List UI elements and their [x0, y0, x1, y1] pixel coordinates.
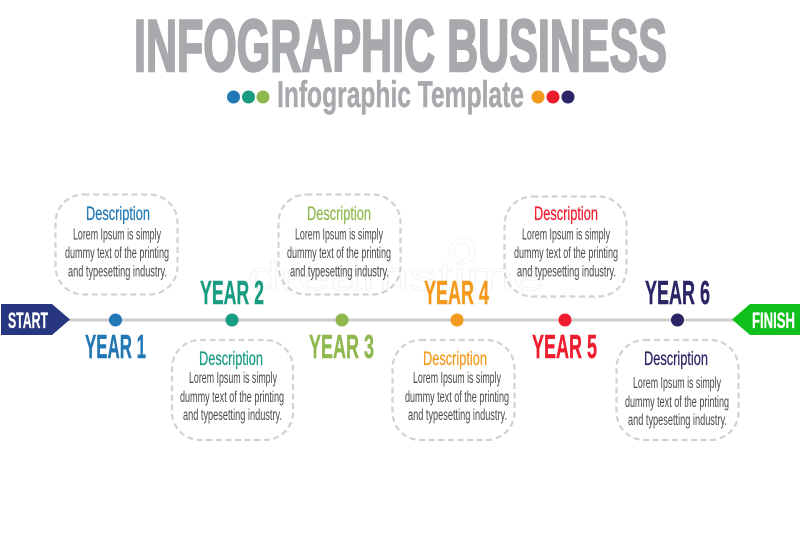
panel: year 1 description: Description	[86, 204, 150, 225]
panel: year 1 description: and typesetting industry.	[68, 264, 167, 280]
panel: year 5 description: Lorem Ipsum is simply	[522, 226, 610, 244]
panel: year 3 description: Lorem Ipsum is simply	[295, 226, 383, 244]
panel: year 4 description	[392, 340, 514, 440]
panel: year 2 description: dummy text of the printing	[180, 389, 284, 406]
panel: year 3 description: and typesetting industry.	[290, 264, 389, 280]
panel: year 4 description: and typesetting industry.	[408, 407, 507, 424]
panel: year 3 description	[278, 194, 400, 294]
milestone: year 3	[309, 314, 374, 365]
milestone: year 2	[200, 274, 264, 326]
panel: year 4 description: dummy text of the printing	[405, 389, 509, 406]
left decorative dots	[227, 90, 270, 104]
timeline line	[68, 318, 734, 322]
panel: year 2 description: Description	[199, 349, 263, 370]
panel: year 4 description: Description	[423, 349, 487, 370]
panel: year 2 description: and typesetting industry.	[183, 407, 282, 424]
milestone: year 1	[85, 314, 146, 365]
panel: year 3 description: dummy text of the printing	[287, 245, 391, 262]
panel: year 6 description: dummy text of the printing	[625, 394, 729, 411]
finish arrow	[732, 304, 800, 335]
panel: year 5 description	[504, 196, 626, 296]
subtitle: Infographic Template	[277, 74, 524, 115]
milestone: year 1: YEAR 1	[85, 328, 146, 365]
start arrow	[1, 304, 70, 335]
panel: year 6 description: Lorem Ipsum is simply	[633, 375, 721, 392]
start arrow: START	[8, 308, 48, 333]
milestone: year 4: YEAR 4	[424, 274, 489, 311]
panel: year 5 description: dummy text of the printing	[514, 245, 618, 262]
panel: year 3 description: Description	[307, 204, 371, 225]
panel: year 5 description: Description	[534, 204, 598, 225]
watermark: dreamstime	[248, 255, 545, 299]
panel: year 4 description: Lorem Ipsum is simply	[413, 370, 501, 387]
panel: year 6 description: and typesetting industry.	[628, 412, 727, 429]
milestone: year 4	[424, 274, 489, 326]
watermark	[248, 238, 545, 299]
panel: year 1 description: Lorem Ipsum is simply	[73, 226, 161, 244]
milestone: year 2: YEAR 2	[200, 274, 264, 311]
milestone: year 6: YEAR 6	[645, 274, 710, 311]
panel: year 6 description: Description	[644, 349, 708, 370]
right decorative dots	[532, 90, 574, 104]
milestone: year 5: YEAR 5	[532, 328, 597, 365]
panel: year 6 description	[616, 340, 738, 440]
panel: year 5 description: and typesetting industry.	[517, 264, 616, 280]
panel: year 2 description: Lorem Ipsum is simply	[189, 370, 277, 387]
panel: year 2 description	[172, 340, 293, 440]
panel: year 1 description	[56, 194, 178, 294]
panel: year 1 description: dummy text of the printing	[65, 245, 169, 262]
milestone: year 5	[532, 314, 597, 365]
milestone: year 6	[645, 274, 710, 326]
milestone: year 3: YEAR 3	[309, 328, 374, 365]
